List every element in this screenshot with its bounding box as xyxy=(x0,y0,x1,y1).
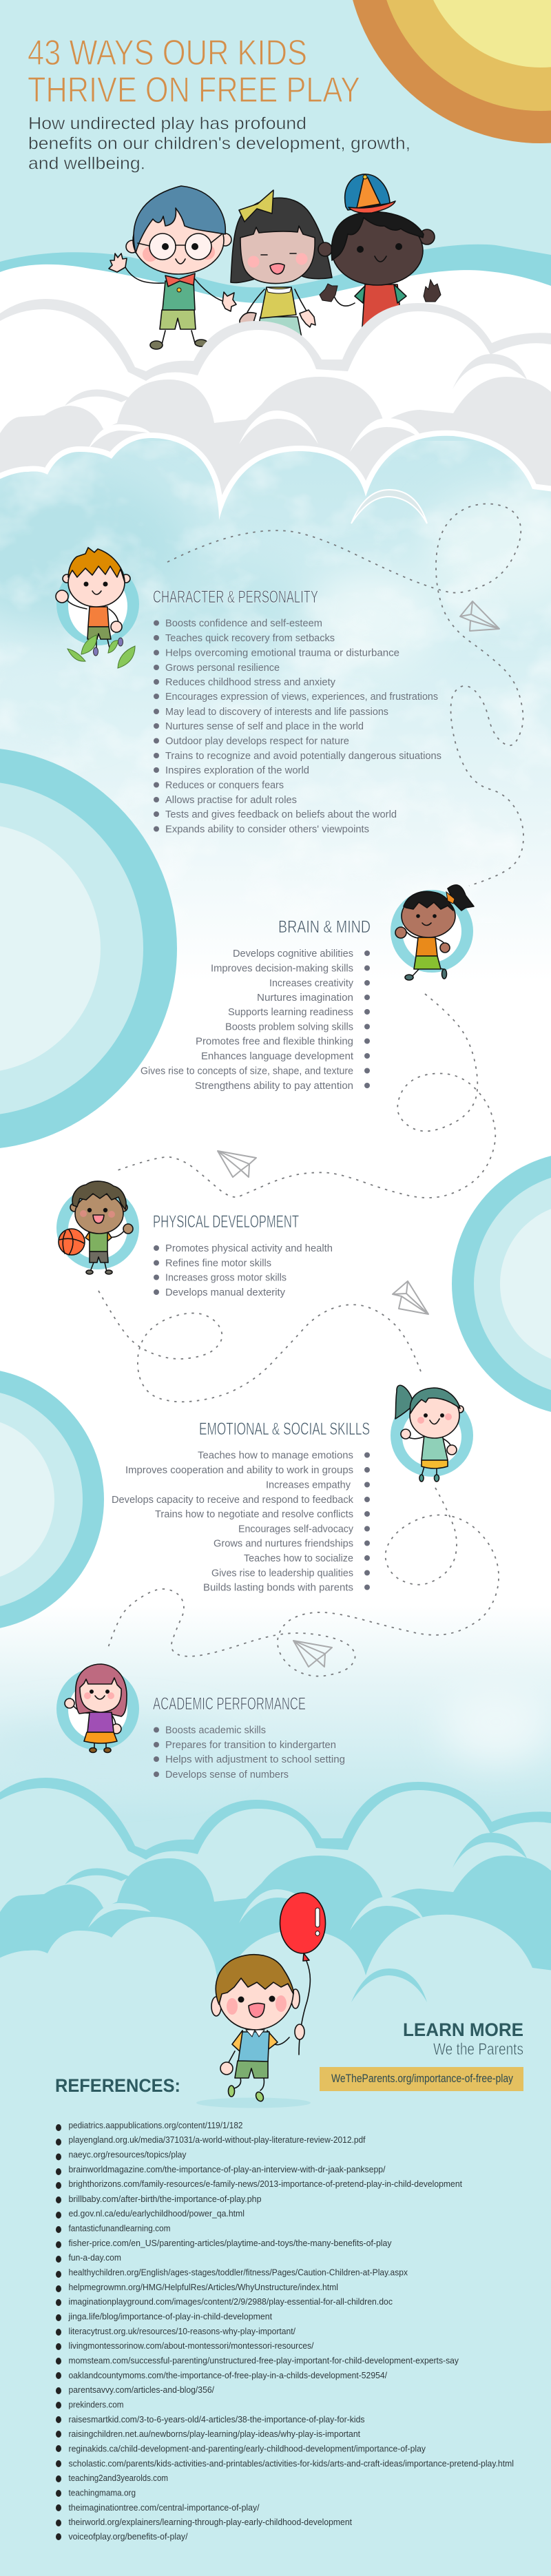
kid with ponytail xyxy=(391,885,474,980)
bullet list: Promotes physical activity and health xyxy=(165,1243,333,1254)
panel: emotional and social skills xyxy=(112,1385,473,1594)
bullet list: Develops capacity to receive and respond to feedback xyxy=(112,1494,353,1506)
bullet list: Boosts problem solving skills xyxy=(225,1021,353,1033)
bullet list: Develops manual dexterity xyxy=(165,1287,285,1298)
references list: brillbaby.com/after-birth/the-importance-of-play.php xyxy=(69,2194,262,2204)
heading: PHYSICAL DEVELOPMENT xyxy=(153,1212,299,1232)
bullet list: May lead to discovery of interests and life passions xyxy=(165,706,388,718)
bullet list: Boosts confidence and self-esteem xyxy=(165,617,322,630)
references list: playengland.org.uk/media/371031/a-world-without-play-literature-review-2012.pdf xyxy=(69,2134,366,2145)
icon: paper plane four xyxy=(293,1641,332,1667)
references list: livingmontessorinow.com/about-montessori/montessori-resources/ xyxy=(69,2340,314,2351)
references list: teaching2and3yearolds.com xyxy=(69,2473,168,2483)
references list: oaklandcountymoms.com/the-importance-of-free-play-in-a-childs-development-52954/ xyxy=(69,2370,387,2380)
bullet list: Trains to recognize and avoid potentially dangerous situations xyxy=(165,750,441,762)
bullet list: Supports learning readiness xyxy=(228,1006,353,1018)
bullet list: Refines fine motor skills xyxy=(165,1258,271,1269)
references list: momsteam.com/successful-parenting/unstructured-free-play-important-for-child-development-experts-say xyxy=(69,2356,459,2365)
ground shadow xyxy=(196,2098,311,2108)
bullet list: Prepares for transition to kindergarten xyxy=(165,1739,336,1751)
icon: paper plane two xyxy=(218,1151,256,1177)
references list: literacytrust.org.uk/resources/10-reasons-why-play-important/ xyxy=(69,2326,295,2336)
bullet list: Teaches how to socialize xyxy=(244,1552,353,1564)
girl with bow xyxy=(231,190,332,344)
bullet list xyxy=(154,1243,333,1298)
kid with orange hair xyxy=(56,548,139,668)
subtitle: How undirected play has profound xyxy=(28,114,306,134)
bullet list: Increases gross motor skills xyxy=(165,1271,287,1284)
references list: healthychildren.org/English/ages-stages/toddler/fitness/Pages/Caution-Children-at-Play.aspx xyxy=(69,2267,408,2277)
bullet list xyxy=(141,948,370,1092)
references list: naeyc.org/resources/topics/play xyxy=(69,2149,187,2160)
icon: paper plane one xyxy=(460,601,499,631)
bullet list: Outdoor play develops respect for nature xyxy=(165,736,349,747)
background circles xyxy=(0,747,551,1631)
bullet list: Boosts academic skills xyxy=(165,1725,266,1736)
link button: WeTheParents.org/importance-of-free-play xyxy=(331,2072,513,2085)
bullet list: Nurtures sense of self and place in the world xyxy=(165,720,364,732)
boy with glasses xyxy=(109,186,236,349)
balloon xyxy=(280,1893,325,2055)
bullet list: Encourages self-advocacy xyxy=(238,1524,353,1535)
bullet list: Grows personal resilience xyxy=(165,662,280,674)
bullet list: Increases empathy xyxy=(266,1479,351,1490)
references list: theirworld.org/explainers/learning-through-play-early-childhood-development xyxy=(69,2517,352,2527)
references list: brainworldmagazine.com/the-importance-of-play-an-interview-with-dr-jaak-panksepp/ xyxy=(69,2164,386,2174)
heading: LEARN MORE xyxy=(403,2019,523,2040)
bullet list xyxy=(154,1725,345,1780)
references list: prekinders.com xyxy=(69,2400,124,2409)
references list: raisesmartkid.com/3-to-6-years-old/4-articles/38-the-importance-of-play-for-kids xyxy=(69,2414,365,2424)
bullet list: Develops sense of numbers xyxy=(165,1769,289,1780)
left circle two xyxy=(0,1368,104,1631)
right circle xyxy=(452,1152,551,1416)
references list: helpmegrowmn.org/HMG/HelpfulRes/Articles/WhyUnstructure/index.html xyxy=(69,2282,338,2292)
bullet list: Inspires exploration of the world xyxy=(165,765,309,776)
bullet list: Gives rise to concepts of size, shape, and texture xyxy=(141,1065,353,1077)
clouds: top layer xyxy=(0,299,551,1097)
panel: physical development xyxy=(56,1181,333,1298)
illustration: boy with red balloon xyxy=(196,1893,325,2108)
boy with propeller cap xyxy=(318,174,441,337)
references list: jinga.life/blog/importance-of-play-in-child-development xyxy=(68,2312,272,2321)
dotted flight path one xyxy=(167,503,523,886)
bullet list: Builds lasting bonds with parents xyxy=(203,1581,353,1594)
subtitle: and wellbeing. xyxy=(28,154,145,174)
sun xyxy=(346,0,551,143)
bullet list: Teaches how to manage emotions xyxy=(198,1449,353,1462)
bullet list xyxy=(112,1449,370,1594)
references list: ed.gov.nl.ca/edu/earlychildhood/power_qa.html xyxy=(69,2208,245,2219)
link button xyxy=(320,2067,523,2091)
clouds: bottom layer xyxy=(0,1778,551,2576)
bullet list xyxy=(154,617,441,835)
subtitle: benefits on our children's development, growth, xyxy=(28,134,410,153)
crescent over watercolor xyxy=(351,490,427,523)
panel: character and personality xyxy=(56,548,441,835)
bullet list: Promotes free and flexible thinking xyxy=(196,1036,353,1047)
bullet list: Improves cooperation and ability to work in groups xyxy=(125,1464,353,1476)
bullet list: Gives rise to leadership qualities xyxy=(211,1568,353,1579)
references list: parentsavvy.com/articles-and-blog/356/ xyxy=(69,2385,214,2395)
references list xyxy=(56,2120,514,2542)
heading: BRAIN & MIND xyxy=(278,917,371,937)
icon: paper plane three xyxy=(393,1281,428,1314)
bullet list: Nurtures imagination xyxy=(257,992,353,1004)
watercolor background: lower xyxy=(0,1605,551,1894)
back cloud mass xyxy=(0,1856,551,2066)
panel: academic performance xyxy=(56,1664,345,1780)
left circle one xyxy=(0,747,177,1150)
bullet list: Increases creativity xyxy=(269,977,353,989)
references list: voiceofplay.org/benefits-of-play/ xyxy=(69,2531,188,2542)
title xyxy=(28,33,360,110)
bullet list: Enhances language development xyxy=(201,1050,354,1062)
dotted flight path four xyxy=(107,1488,499,1676)
learn more block xyxy=(320,2019,523,2091)
bullet list: Helps with adjustment to school setting xyxy=(165,1754,345,1765)
sky background xyxy=(0,0,551,358)
panel: brain and mind xyxy=(141,885,474,1092)
references list: theimaginationtree.com/central-importance-of-play/ xyxy=(69,2502,260,2513)
references list: pediatrics.aappublications.org/content/119/1/182 xyxy=(69,2120,242,2130)
references list: raisingchildren.net.au/newborns/play-learning/play-ideas/why-play-is-important xyxy=(69,2429,360,2439)
bullet list: Develops cognitive abilities xyxy=(233,948,353,959)
bullet list: Strengthens ability to pay attention xyxy=(195,1080,353,1092)
bullet list: Trains how to negotiate and resolve conflicts xyxy=(155,1508,353,1520)
references list: fantasticfunandlearning.com xyxy=(69,2223,171,2233)
dotted flight path three xyxy=(98,1291,422,1402)
brand name: We the Parents xyxy=(433,2040,523,2059)
crescents xyxy=(65,354,527,406)
bullet list: Encourages expression of views, experiences, and frustrations xyxy=(165,691,438,703)
title: 43 WAYS OUR KIDS xyxy=(28,33,307,73)
title: THRIVE ON FREE PLAY xyxy=(28,70,360,110)
cloud outline xyxy=(0,1778,551,1997)
references list: reginakids.ca/child-development-and-parenting/early-childhood-development/importance-of-play xyxy=(69,2444,426,2453)
references list: fisher-price.com/en_US/parenting-articles/playtime-and-toys/the-many-benefits-of-play xyxy=(69,2238,392,2248)
kid with basketball xyxy=(56,1181,139,1274)
boy xyxy=(211,1955,304,2102)
front cloud xyxy=(0,1915,551,2576)
heading: CHARACTER & PERSONALITY xyxy=(153,588,318,607)
bullet list: Expands ability to consider others' viewpoints xyxy=(165,824,369,835)
references list: imaginationplayground.com/images/content/2/9/2988/play-essential-for-all-children.doc xyxy=(69,2296,393,2307)
watercolor background: upper xyxy=(0,435,551,922)
bullet list: Reduces childhood stress and anxiety xyxy=(165,676,335,688)
illustration: three children xyxy=(109,174,441,349)
bullet list: Tests and gives feedback on beliefs about the world xyxy=(165,809,397,820)
cloud interior xyxy=(0,1788,551,2032)
wave band and white hill xyxy=(0,245,551,523)
kid with green hair xyxy=(391,1385,473,1482)
heading: EMOTIONAL & SOCIAL SKILLS xyxy=(199,1420,370,1439)
back cloud mass xyxy=(0,377,551,588)
references list: fun-a-day.com xyxy=(69,2252,121,2263)
bullet list: Reduces or conquers fears xyxy=(165,780,284,791)
cloud interior xyxy=(0,309,551,553)
references list: teachingmama.org xyxy=(69,2488,136,2497)
bullet list: Allows practise for adult roles xyxy=(165,794,297,806)
references list: brighthorizons.com/family-resources/e-family-news/2013-importance-of-pretend-play-in-child-development xyxy=(69,2179,462,2189)
bullet list: Teaches quick recovery from setbacks xyxy=(165,632,335,644)
bullet list: Helps overcoming emotional trauma or disturbance xyxy=(165,647,399,658)
bullet list: Improves decision-making skills xyxy=(211,963,353,974)
bullet list: Grows and nurtures friendships xyxy=(214,1537,353,1550)
dotted flight path two xyxy=(116,994,495,1198)
references list: scholastic.com/parents/kids-activities-and-printables/activities-for-kids/arts-and-craft-ideas/importance-pretend-play.html xyxy=(69,2458,514,2469)
subtitle xyxy=(28,114,410,174)
references heading: REFERENCES: xyxy=(55,2075,180,2096)
front cloud outline xyxy=(0,436,551,1097)
heading: ACADEMIC PERFORMANCE xyxy=(153,1694,306,1714)
crescents xyxy=(65,1833,527,1884)
kid with pink hair xyxy=(56,1664,139,1752)
cloud outline xyxy=(0,299,551,519)
